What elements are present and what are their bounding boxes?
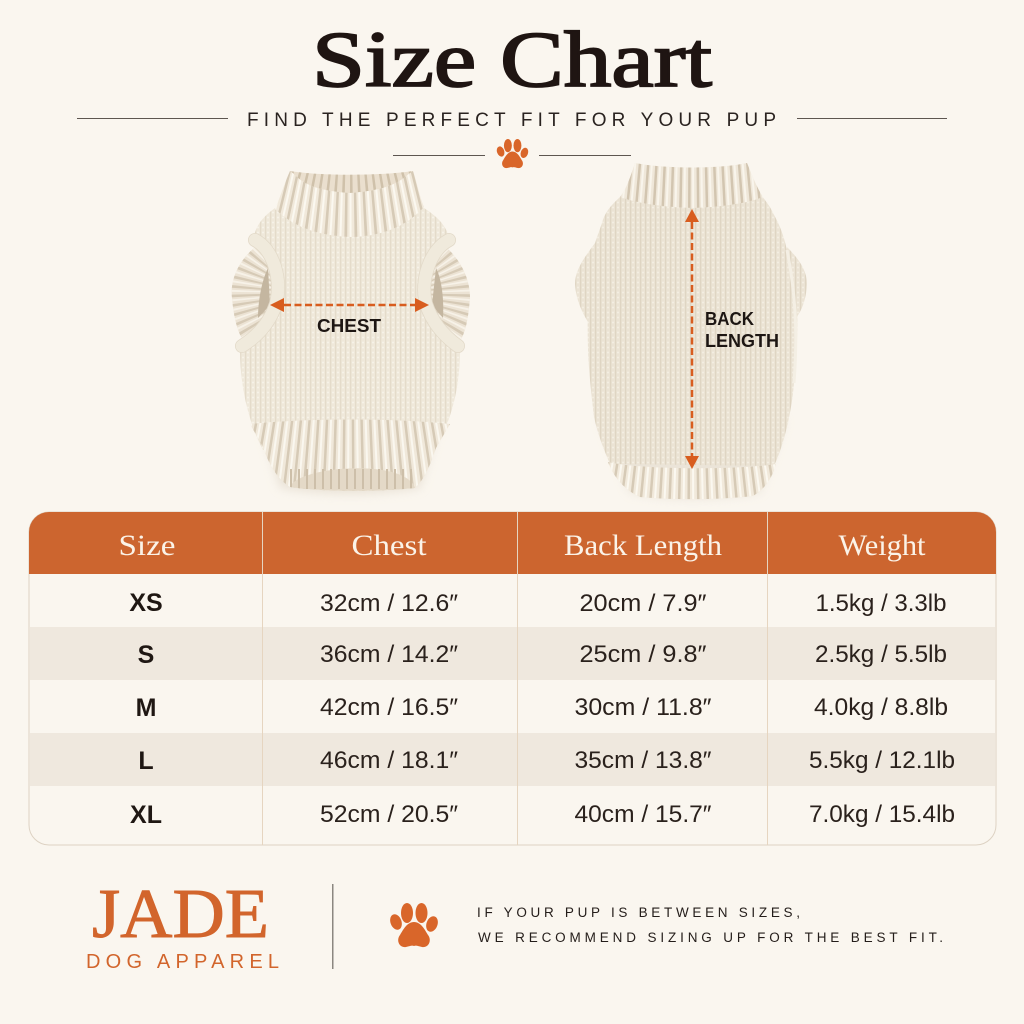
row M: M	[136, 694, 156, 722]
sizing tip: IF YOUR PUP IS BETWEEN SIZES,	[477, 905, 800, 920]
header labels: Chest	[352, 529, 427, 562]
header labels: Back Length	[564, 529, 722, 562]
subtitle with side rules: FIND THE PERFECT FIT FOR YOUR PUP	[247, 110, 776, 131]
row L: 5.5kg / 12.1lb	[809, 747, 955, 774]
row S: 25cm / 9.8″	[580, 641, 707, 668]
row XS	[129, 589, 946, 617]
row L: 35cm / 13.8″	[574, 747, 712, 774]
paw divider	[393, 139, 631, 168]
front hem ribbing	[252, 420, 450, 491]
row XL: 7.0kg / 15.4lb	[809, 801, 955, 828]
front right sleeve	[431, 249, 470, 339]
title: Size Chart	[312, 17, 712, 104]
table background	[29, 512, 996, 845]
row S: S	[138, 641, 154, 669]
row XS: 1.5kg / 3.3lb	[816, 590, 946, 617]
chest measurement arrow	[270, 298, 429, 312]
hem opening band	[290, 468, 415, 491]
back length measurement arrow	[685, 209, 699, 469]
back shadow	[600, 420, 785, 498]
back hem	[608, 462, 776, 500]
front armhole rims	[242, 240, 278, 346]
back body	[588, 197, 797, 466]
row S: 2.5kg / 5.5lb	[815, 641, 947, 668]
footer vertical divider	[332, 884, 334, 969]
row L: L	[138, 747, 154, 775]
brand logo: DOG APPAREL	[86, 951, 279, 973]
row M	[136, 694, 948, 722]
icon: paw	[388, 903, 440, 947]
size table	[29, 512, 996, 845]
header labels: Weight	[838, 529, 926, 562]
front left sleeve	[232, 248, 271, 338]
row XL: 40cm / 15.7″	[574, 801, 712, 828]
front collar fold	[275, 171, 424, 237]
row M: 42cm / 16.5″	[320, 694, 459, 721]
sizing tip: WE RECOMMEND SIZING UP FOR THE BEST FIT.	[478, 930, 943, 945]
row L	[138, 747, 955, 775]
front armhole openings	[258, 268, 270, 318]
back length label	[705, 309, 779, 351]
table header band	[29, 512, 996, 574]
chest label: CHEST	[317, 316, 381, 336]
front collar back band	[290, 171, 412, 193]
back right sleeve	[780, 247, 807, 318]
row XS: XS	[129, 589, 163, 617]
back left sleeve	[575, 243, 605, 322]
back body edge highlight	[787, 250, 796, 383]
row XL: XL	[130, 801, 162, 829]
row M: 30cm / 11.8″	[574, 694, 712, 721]
column dividers	[262, 512, 768, 845]
header labels	[118, 529, 926, 562]
row S: 36cm / 14.2″	[320, 641, 459, 668]
row XL	[130, 801, 955, 829]
row XL: 52cm / 20.5″	[320, 801, 459, 828]
brand logo: JADE	[92, 876, 269, 953]
front body	[240, 208, 460, 450]
sweater back illustration	[575, 163, 807, 500]
row M: 4.0kg / 8.8lb	[814, 694, 948, 721]
back length label: LENGTH	[705, 331, 779, 351]
back collar	[620, 163, 762, 208]
row XS: 20cm / 7.9″	[580, 590, 707, 617]
front shadow	[260, 420, 440, 494]
row S	[138, 641, 947, 669]
row XS: 32cm / 12.6″	[320, 590, 459, 617]
back length label: BACK	[705, 309, 754, 329]
sweater front illustration	[232, 171, 470, 496]
alternating rows	[30, 627, 995, 786]
header labels: Size	[118, 529, 176, 562]
row L: 46cm / 18.1″	[320, 747, 459, 774]
sizing tip	[477, 905, 943, 945]
